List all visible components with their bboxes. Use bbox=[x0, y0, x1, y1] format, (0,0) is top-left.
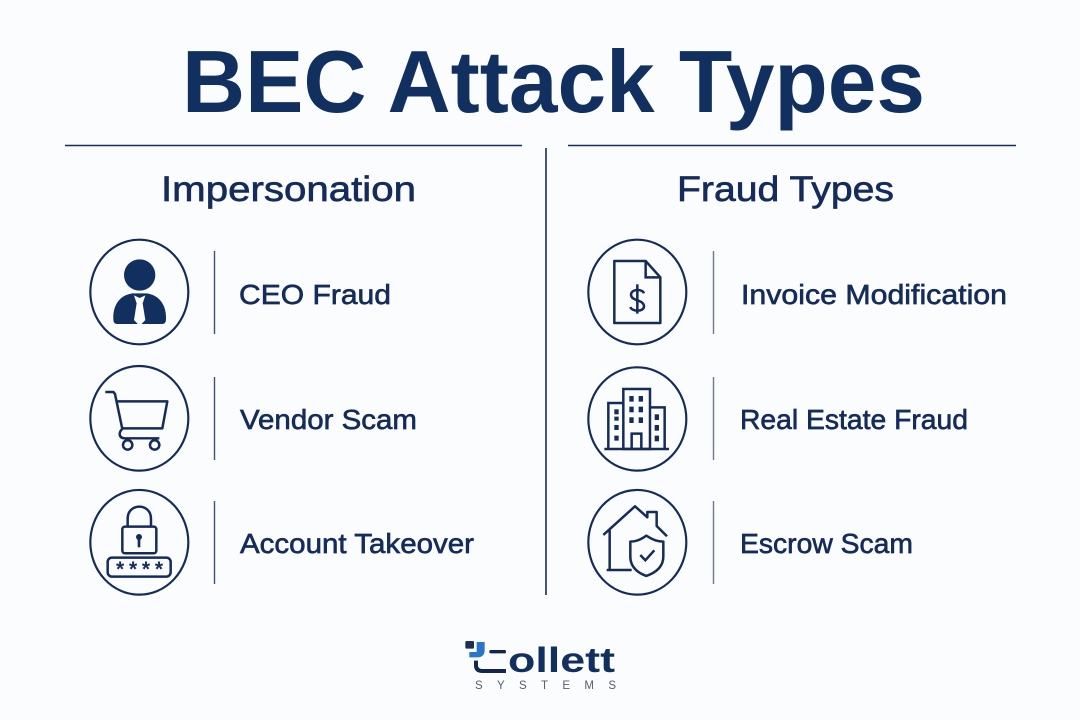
row: Vendor Scam bbox=[90, 366, 417, 471]
logo wordmark: ollett bbox=[508, 641, 615, 680]
label: Account Takeover: Account Takeover bbox=[240, 528, 474, 559]
row: Account Takeover bbox=[90, 490, 474, 595]
heading: Fraud Types: Fraud Types bbox=[677, 170, 894, 209]
icon: office buildings bbox=[588, 367, 686, 471]
row: CEO Fraud bbox=[90, 240, 391, 344]
row: Real Estate Fraud bbox=[588, 367, 968, 471]
panel: fraud types bbox=[588, 170, 1007, 595]
icon: padlock and password bbox=[90, 490, 188, 595]
logo mark bbox=[465, 641, 506, 671]
row: Invoice Modification bbox=[588, 240, 1007, 344]
logo tagline: SYSTEMS bbox=[475, 680, 616, 692]
icon: house with shield bbox=[588, 490, 686, 595]
icon: shopping cart bbox=[90, 366, 188, 471]
logo: Collett Systems bbox=[465, 641, 616, 692]
password asterisks: **** bbox=[116, 558, 164, 581]
icon: invoice document bbox=[588, 240, 686, 344]
label: Invoice Modification: Invoice Modification bbox=[741, 279, 1007, 310]
label: Real Estate Fraud: Real Estate Fraud bbox=[740, 404, 968, 435]
row: Escrow Scam bbox=[588, 490, 913, 595]
label: CEO Fraud: CEO Fraud bbox=[239, 279, 391, 310]
title: BEC Attack Types bbox=[182, 32, 925, 131]
icon: executive bbox=[90, 240, 188, 344]
label: Vendor Scam: Vendor Scam bbox=[240, 404, 417, 435]
label: Escrow Scam: Escrow Scam bbox=[740, 528, 913, 559]
panel: impersonation bbox=[90, 170, 474, 595]
heading: Impersonation: Impersonation bbox=[161, 170, 416, 209]
